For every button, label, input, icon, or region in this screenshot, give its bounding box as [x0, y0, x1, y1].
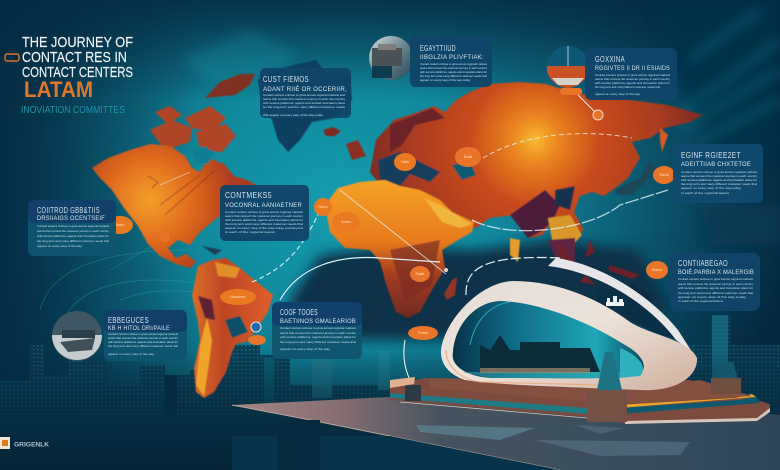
panel: right: EGINF RGIEE2ET [681, 151, 741, 160]
panel: lower right: CONTIIABEGAO [678, 259, 728, 268]
photo circle top [369, 36, 413, 80]
panel: lower right: Contact centers ontinue to grow across regional markets [678, 277, 754, 281]
europe dark overlays [390, 108, 445, 152]
panel: africa left: CONTMEKS5 [225, 191, 272, 200]
caribbean [202, 246, 222, 255]
greenland [258, 60, 352, 152]
orange location markers: Sonita [659, 173, 669, 177]
orange location markers: Bonia [464, 155, 472, 159]
panel: top centre left: ADANT RIIÉ OR OCCERIIR, [263, 84, 347, 93]
indonesia and islands [557, 240, 640, 285]
panel: lower left: with service platforms, agents and innovation plans for [108, 340, 178, 344]
orange location markers: Trade [401, 160, 409, 164]
building window [453, 301, 644, 378]
panel: africa left [220, 185, 309, 241]
panel: africa left: VOCONRAL AANIAETNER [225, 202, 302, 209]
panel: left [28, 200, 116, 256]
panel: africa left: the long term and many different customer needs that [225, 222, 303, 226]
panel: left: COIITROD GBB&TIIS [37, 206, 100, 215]
panel: top centre: the long term and many different customer needs that [420, 74, 487, 78]
panel: lower centre: appear on every step of the way [280, 347, 331, 351]
panel: lower right: in each of the regional teams [678, 299, 724, 303]
panel: lower right: with service platforms, agents and innovation plans for [678, 286, 753, 290]
panel: top right: the long term and many different customer needs that [595, 85, 660, 89]
india and south asia dark [510, 190, 560, 238]
panel: top right [585, 48, 677, 100]
orange location markers [107, 88, 675, 345]
city skyline left [0, 345, 390, 470]
panel: lower left: EBBEGUCES [108, 316, 149, 325]
panel: top right: Contact centers ontinue to grow across regional markets [595, 73, 671, 77]
panel: right [673, 144, 763, 203]
panel: lower centre: COOF TOOES [280, 308, 318, 317]
panel: africa left: appear on every step of the way today and beyond [225, 226, 303, 230]
panel: top centre: with service platforms, agents and innovation plans for [420, 70, 487, 74]
dashed routes [160, 95, 668, 380]
panel: lower left [104, 310, 187, 361]
panel: right: ADEITTIIAB CHXTETOE [681, 161, 751, 168]
panel: left: teams that connect the customer journey in each country [37, 229, 110, 233]
panel: top right: with service platforms, agents and innovation plans for [595, 81, 670, 85]
panel: top centre left: CUST FIEMOS [263, 75, 309, 84]
panel: left: appear on every step of the way [37, 244, 83, 248]
title [5, 35, 133, 116]
canadian arctic islands [150, 74, 255, 152]
orange location markers: Bestna [652, 268, 662, 272]
panel: lower right: the long term and many different customer needs that [678, 291, 753, 295]
small skyline on shell [606, 296, 624, 306]
panel: top right: RGGIVTES II DR II ESIAIDS [595, 65, 670, 72]
panel: left: Contact centers ontinue to grow across regional markets [37, 224, 110, 228]
deck surface [232, 397, 780, 470]
city skyline right [680, 315, 780, 430]
orange location markers: Nearshore [231, 295, 246, 299]
panel: lower centre: the long term and many different customer needs that [280, 340, 356, 344]
panel: top right: GOXXINA [595, 55, 625, 64]
panel: left: the long term and many different customer needs that [37, 239, 109, 243]
panel: lower left: teams that connect the customer journey in each country [108, 336, 179, 340]
panel: top centre: IIBGLZIA PLIVFTIAK: [420, 54, 484, 61]
building platform [390, 362, 770, 424]
iceland [323, 127, 341, 136]
building main shell [441, 281, 697, 390]
panel: africa left: Contact centers ontinue to grow across regional markets [225, 210, 304, 214]
panel: top centre left: with service platforms, agents and shared innovation plans [263, 101, 346, 105]
panel: top centre left: for the long term and the many different customer needs [263, 105, 346, 109]
panel: top centre [410, 37, 492, 87]
panel: lower centre: with service platforms, agents and innovation plans for [280, 335, 356, 339]
europe and asia [370, 82, 703, 240]
panel: right: with service platforms, agents and innovation plans for [681, 178, 757, 182]
panel: right: appear on every step of the way today [681, 186, 742, 190]
title: CONTACT RES IN [22, 50, 127, 66]
panel: top centre left [260, 68, 351, 118]
bottom shade [0, 350, 780, 470]
world map [92, 60, 703, 398]
panel: lower left: Contact centers ontinue to grow across regional markets [108, 332, 179, 336]
orange location markers: Pantoe [418, 331, 428, 335]
north america [92, 144, 258, 268]
orange location markers: Mateo [116, 223, 125, 227]
panel: top centre: appear on every step of the way today [420, 78, 471, 82]
uk [346, 140, 366, 160]
panel: lower right: BOIÉ.PARBIA X MALERGIB [678, 267, 754, 276]
photo circle lower left [52, 311, 102, 361]
africa [325, 180, 474, 318]
panel: top centre left: Contact centers ontinue to grow across regional markets and [263, 93, 345, 97]
panel: africa left: teams that connect the customer journey in each country [225, 214, 304, 218]
panel: lower centre: BAETIINOS GMALEARIOB [280, 318, 356, 325]
panel: top right: teams that connect the customer journey in each country [595, 77, 671, 81]
building front pylon [597, 352, 622, 390]
panel: top centre left: teams that connect the customer journey in each new country [263, 97, 346, 101]
orange location markers: Fanoo [318, 205, 328, 209]
orange location markers: Sonma [341, 220, 351, 224]
panel: lower right [670, 253, 760, 311]
title: CONTACT CENTERS [22, 65, 133, 81]
panel: top centre: teams that connect the customer journey in each country [420, 66, 487, 70]
footer logo: GRIGENLK [14, 442, 49, 448]
panel: lower left: KB H HITOL DRI/PAILE [108, 325, 170, 332]
photo circle right [547, 46, 589, 88]
panel: africa left: with service platforms, agents and innovation plans for [225, 218, 303, 222]
panel: africa left: in each of the regional teams [225, 230, 276, 234]
south america [192, 258, 273, 398]
panel: top centre: EGAYTTIIUD [420, 44, 456, 53]
building upper shell [548, 258, 692, 352]
panel: lower left: appear on every step of the way [108, 352, 155, 356]
title: INOVIATION COMMITTES [21, 105, 125, 116]
australia dark [597, 285, 652, 310]
panel: lower right: teams that connect the customer journey in each country [678, 282, 754, 286]
title: THE JOURNEY OF [22, 35, 133, 51]
panel: lower centre [272, 302, 362, 359]
panel: lower left: the long term and many different customer needs that [108, 344, 178, 348]
panel: lower centre: teams that connect the customer journey in each country [280, 331, 357, 335]
title: LATAM [24, 77, 93, 102]
orange location markers: Enalle [416, 272, 425, 276]
panel: right: the long term and many different customer needs that [681, 182, 757, 186]
panel: top centre left: that appear on every step of the way today [263, 113, 324, 117]
panel: right: in each of the regional teams [681, 191, 730, 195]
panel: top right: appear on every step of the way [595, 92, 641, 96]
panel: right: teams that connect the customer journey in each country [681, 174, 758, 178]
panel: right: Contact centers ontinue to grow across regional markets [681, 170, 758, 174]
panel: lower centre: Contact centers ontinue to grow across regional markets [280, 326, 357, 330]
panel: left: with service platforms, agents and innovation plans for [37, 234, 109, 238]
panel: lower right: appear on every step of the way today [678, 295, 747, 299]
panel: left: DRSIIAIGS OCENTSEIF [37, 215, 105, 222]
madagascar [444, 277, 457, 300]
footer logo [0, 437, 49, 449]
panel: top centre: Contact centers ontinue to grow across regional markets [420, 62, 488, 66]
japan [614, 160, 658, 195]
